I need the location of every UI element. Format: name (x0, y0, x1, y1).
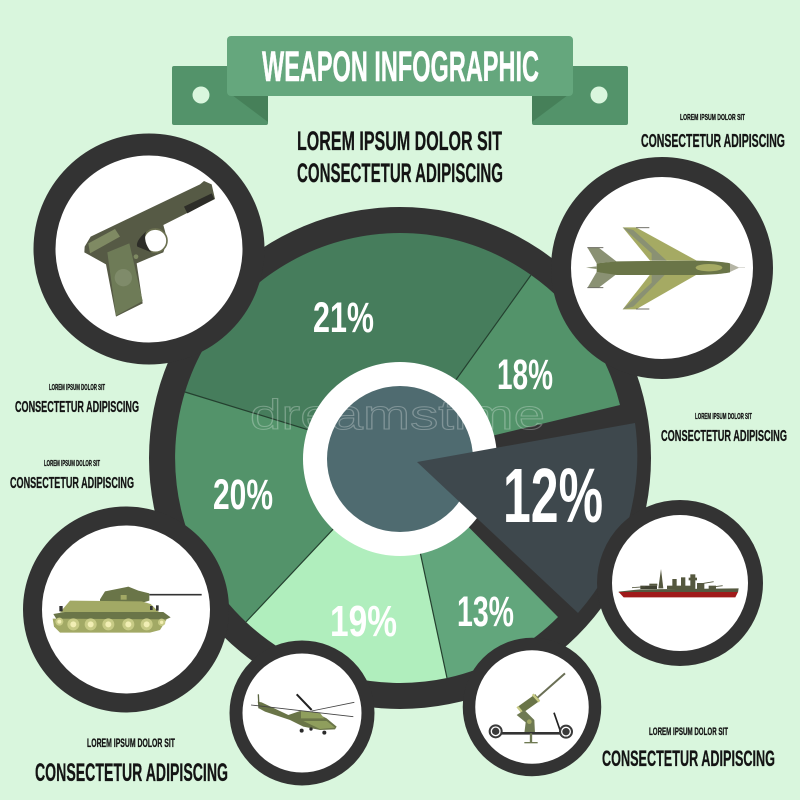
label 21%: 21% (313, 294, 374, 342)
text block: top right (641, 112, 785, 151)
slice 18% (400, 275, 620, 458)
text block: left lower: LOREM IPSUM DOLOR SIT (44, 459, 100, 468)
panel: jet (561, 167, 763, 369)
banner main ribbon (227, 36, 573, 96)
text block: left lower: CONSECTETUR ADIPISCING (10, 475, 134, 492)
ship circle (604, 508, 756, 658)
white ring (303, 362, 497, 556)
donut chart (149, 207, 651, 709)
text block: bottom left (35, 736, 228, 787)
slice 19% (246, 458, 447, 683)
title banner (172, 36, 628, 125)
outer ring (149, 207, 651, 709)
panel: tank (32, 516, 220, 703)
heading text block: LOREM IPSUM DOLOR SIT (297, 126, 502, 156)
icon: anti-aircraft gun (490, 673, 572, 743)
heading text block (297, 126, 503, 188)
text block: bottom left: LOREM IPSUM DOLOR SIT (87, 736, 175, 750)
text block: top right: LOREM IPSUM DOLOR SIT (680, 112, 745, 122)
panel: helicopter (236, 647, 368, 779)
text block: left upper: LOREM IPSUM DOLOR SIT (49, 383, 105, 392)
text block: bottom right (602, 726, 775, 771)
heading text block: CONSECTETUR ADIPISCING (297, 158, 503, 188)
banner right tail (532, 66, 628, 125)
icon: tank (53, 587, 202, 633)
label 12%: 12% (503, 453, 603, 539)
text block: left upper (15, 383, 139, 416)
label 18%: 18% (497, 351, 553, 399)
pistol circle (44, 144, 254, 354)
panel: anti-aircraft gun (469, 644, 595, 770)
icon: ship (619, 569, 739, 597)
watermark: dreamstime (250, 391, 545, 438)
slice 20% (175, 392, 400, 622)
banner left tail (172, 66, 268, 125)
label 13%: 13% (457, 588, 514, 636)
panel: ship (604, 508, 756, 658)
slice dividers (185, 275, 531, 678)
icon: helicopter (251, 694, 354, 735)
panel: pistol (44, 144, 254, 354)
slice 21% (185, 233, 531, 458)
jet circle (561, 167, 763, 369)
tank circle (32, 516, 220, 703)
label 20%: 20% (213, 471, 273, 519)
text block: bottom left: CONSECTETUR ADIPISCING (35, 759, 228, 787)
text block: right (661, 412, 787, 445)
gun circle (469, 644, 595, 770)
title: WEAPON INFOGRAPHIC (262, 43, 539, 91)
helicopter circle (236, 647, 368, 779)
label 19%: 19% (330, 597, 397, 646)
centre disc (327, 386, 473, 532)
text block: left upper: CONSECTETUR ADIPISCING (15, 399, 139, 416)
slice 13% (400, 458, 558, 678)
text block: bottom right: LOREM IPSUM DOLOR SIT (649, 726, 728, 738)
text block: right: LOREM IPSUM DOLOR SIT (695, 412, 752, 421)
icon: jet (586, 227, 745, 309)
text block: left lower (10, 459, 134, 492)
icon: pistol (84, 181, 215, 317)
slice 12% highlighted (417, 423, 637, 613)
